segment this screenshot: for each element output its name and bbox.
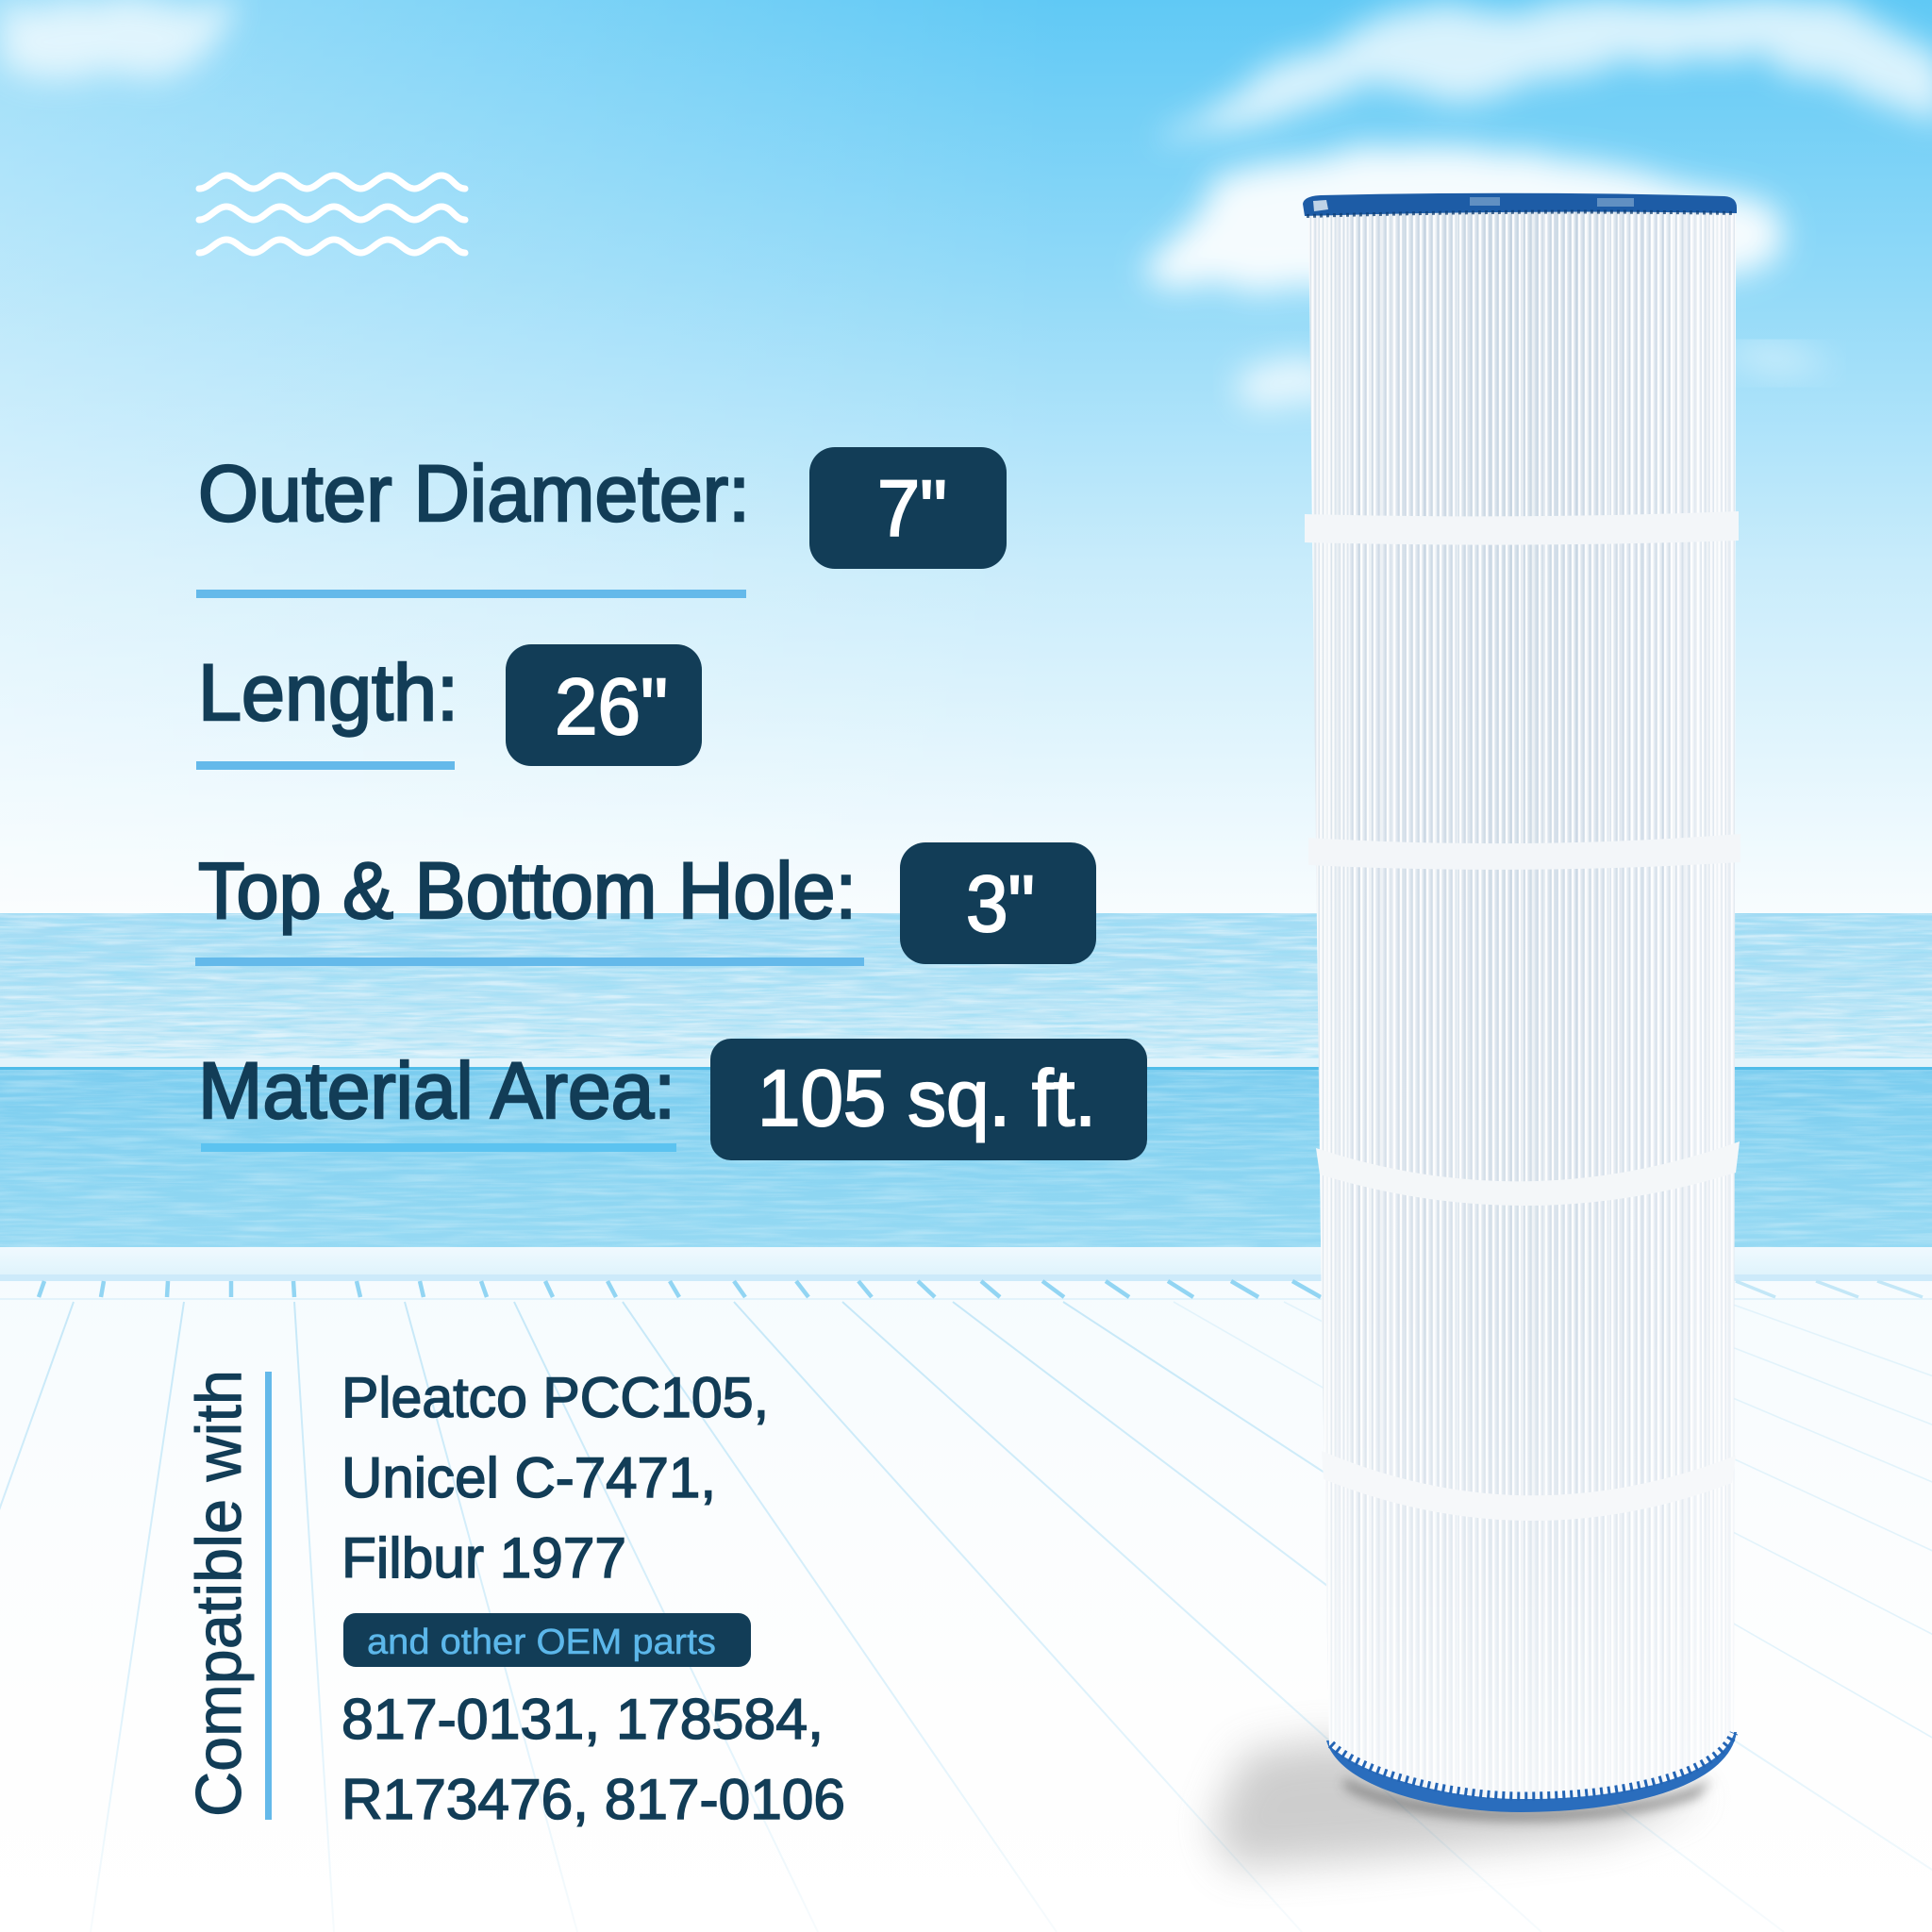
compatible part numbers list: 817-0131, 178584, <box>341 1688 824 1751</box>
top blue end cap <box>1303 193 1737 216</box>
compatible part numbers list <box>341 1366 845 1831</box>
spec row: top and bottom hole <box>195 842 1096 966</box>
compatible part numbers list: Filbur 1977 <box>341 1526 626 1590</box>
spec row: length: Length: <box>198 648 458 737</box>
background: sky <box>0 0 1932 915</box>
product: pleated cartridge filter <box>1212 193 1745 1868</box>
retaining strap 4 <box>1322 1451 1736 1521</box>
spec row: material area: 105 sq. ft. <box>758 1054 1096 1142</box>
bottom blue end cap <box>1326 1732 1737 1812</box>
tag: other OEM parts: and other OEM parts <box>367 1623 716 1662</box>
spec row: outer diameter <box>196 447 1007 598</box>
retaining strap 1 <box>1305 511 1739 545</box>
icon: water waves <box>199 175 465 253</box>
retaining strap 3 <box>1316 1141 1740 1206</box>
compatible with: vertical heading: Compatible with <box>183 1370 255 1817</box>
background: sea <box>0 913 1932 1247</box>
clouds <box>0 0 1932 410</box>
spec row: material area: Material Area: <box>198 1046 675 1135</box>
spec row: length <box>196 644 702 770</box>
compatible part numbers list: Unicel C-7471, <box>341 1446 716 1509</box>
spec row: top and bottom hole: Top & Bottom Hole: <box>198 846 857 935</box>
background: pool deck <box>0 1247 1932 1932</box>
pleated body <box>1302 203 1745 1807</box>
spec row: top and bottom hole: 3" <box>966 859 1035 948</box>
spec row: outer diameter: Outer Diameter: <box>198 449 750 538</box>
compatible part numbers list: R173476, 817-0106 <box>341 1768 845 1831</box>
spec row: length: 26" <box>555 662 668 751</box>
spec row: material area <box>198 1039 1147 1160</box>
floor shadow <box>1212 1740 1712 1868</box>
retaining strap 2 <box>1308 834 1740 870</box>
compatible part numbers list: Pleatco PCC105, <box>341 1366 769 1429</box>
pleat tips on bottom cap <box>1331 1733 1734 1796</box>
spec row: outer diameter: 7" <box>877 464 947 553</box>
tag: other OEM parts <box>343 1613 751 1667</box>
